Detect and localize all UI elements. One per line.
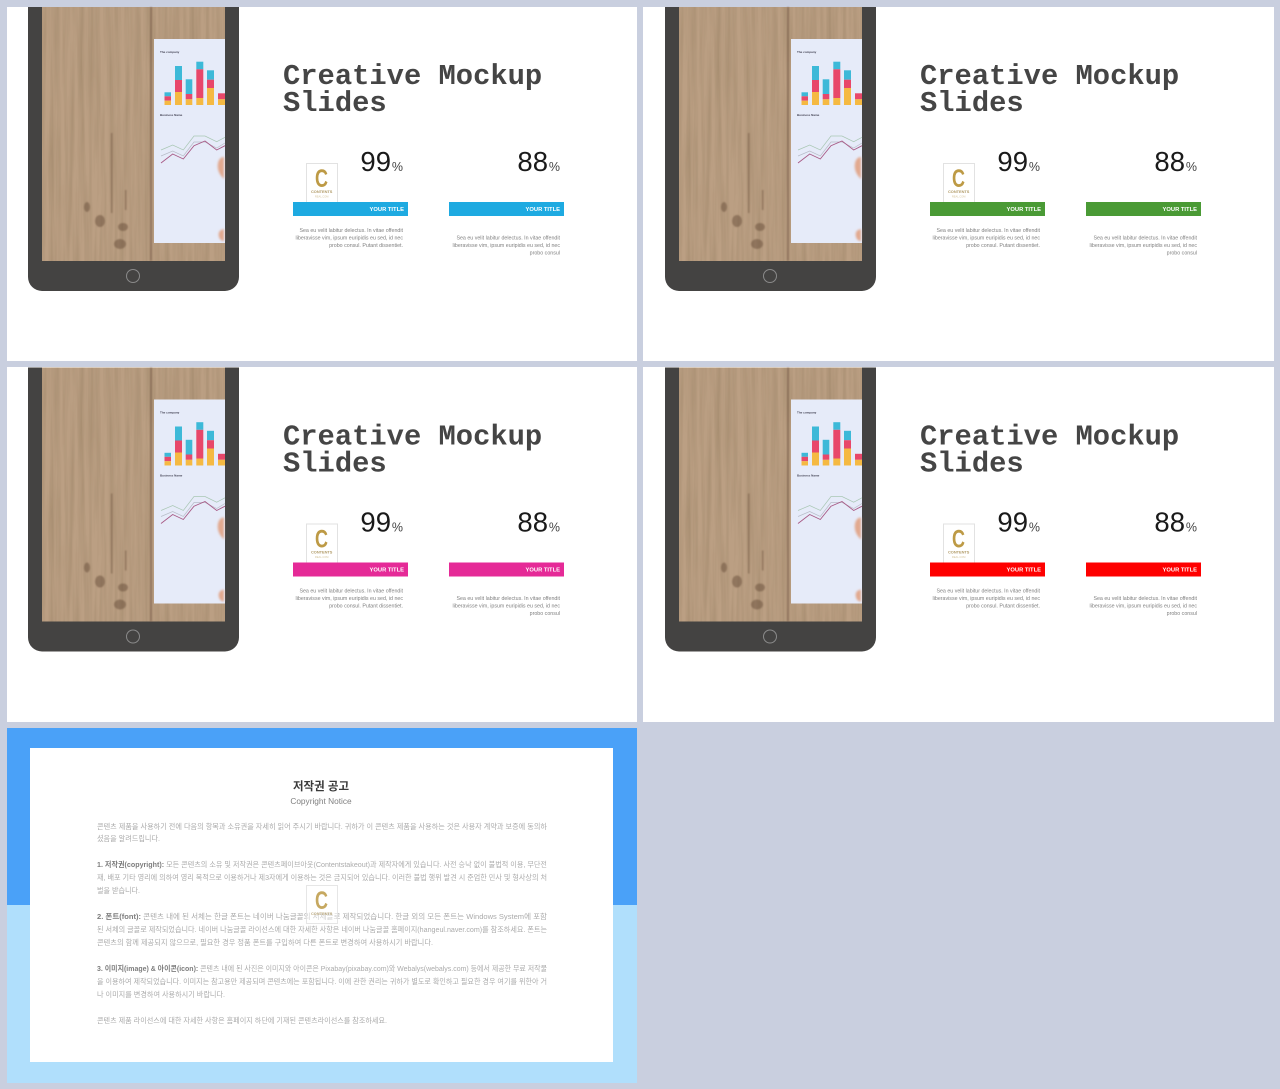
text right: Sea eu velit labitur delectus. In vitae offendit bbox=[1093, 596, 1198, 602]
section 3: image and icon: 3. 이미지(image) & 아이콘(icon): 콘텐츠 내에 된 사진은 이미지와 아이콘은 Pixabay(pixabay.com)와 Webalys(webalys.com) 등에서 제공한 무료 저작물 bbox=[97, 963, 547, 973]
stat: 88%: 88 bbox=[517, 146, 548, 177]
text right: probo consul bbox=[1167, 250, 1197, 256]
stat: 99%: 99 bbox=[360, 506, 391, 538]
panel: slide 2 green bbox=[643, 7, 1274, 361]
stat: 88%: 88 bbox=[517, 506, 548, 538]
logo watermark: CONTENTS bbox=[311, 189, 333, 194]
logo watermark: C bbox=[315, 526, 328, 554]
icon: tablet mockup bbox=[28, 7, 239, 291]
logo watermark bbox=[306, 164, 338, 202]
panel: slide 4 red bbox=[643, 367, 1274, 722]
panel: slide 3 pink bbox=[7, 367, 637, 722]
icon: tablet mockup: The company bbox=[160, 410, 180, 414]
closing line: 콘텐츠 제품 라이선스에 대한 자세한 사항은 홈페이지 하단에 기재된 콘텐츠라이선스를 참조하세요. bbox=[97, 1015, 387, 1025]
logo watermark: CONTENTS bbox=[311, 550, 333, 554]
text left: liberavisse vim, ipsum euripidis eu sed, id nec bbox=[933, 596, 1040, 602]
logo watermark: REAL.COM bbox=[952, 555, 965, 559]
icon: tablet mockup: Business Name bbox=[797, 113, 820, 117]
icon: tablet mockup: Business Name bbox=[160, 474, 183, 478]
subheading: Copyright Notice bbox=[290, 796, 352, 806]
label bar left: YOUR TITLE bbox=[370, 568, 404, 574]
logo watermark: CONTENTS bbox=[948, 550, 970, 554]
text left: probo consul. Putant dissentiet. bbox=[966, 243, 1040, 249]
text left: Sea eu velit labitur delectus. In vitae offendit bbox=[936, 588, 1041, 594]
icon: tablet mockup: The company bbox=[160, 50, 180, 54]
intro text bbox=[97, 821, 547, 843]
section 2: font: 콘텐츠의 함께 제공되지 않으므로, 필요한 경우 정품 폰트를 구입하여 다른 폰트로 변경하여 사용하시기 바랍니다. bbox=[97, 937, 433, 947]
text right: probo consul bbox=[1167, 611, 1197, 617]
icon: tablet mockup bbox=[28, 368, 239, 652]
text left: liberavisse vim, ipsum euripidis eu sed, id nec bbox=[933, 236, 1040, 242]
label bar right bbox=[449, 562, 564, 576]
stat: 99%: 99 bbox=[360, 146, 391, 177]
section 1: copyright: 벌을 받습니다. bbox=[97, 885, 140, 895]
label bar right: YOUR TITLE bbox=[1163, 568, 1197, 574]
text left: probo consul. Putant dissentiet. bbox=[966, 604, 1040, 610]
label bar right: YOUR TITLE bbox=[526, 568, 560, 574]
stat: 88%: % bbox=[1186, 160, 1197, 174]
panel: slide 1 blue bbox=[7, 7, 637, 361]
label bar left: YOUR TITLE bbox=[370, 207, 404, 213]
stat: 99%: % bbox=[392, 160, 403, 174]
title: Slides bbox=[920, 87, 1024, 120]
logo watermark bbox=[306, 524, 338, 563]
text right: liberavisse vim, ipsum euripidis eu sed, id nec bbox=[453, 243, 560, 249]
logo watermark: C bbox=[315, 887, 328, 915]
title: Creative Mockup bbox=[283, 60, 542, 93]
text right: Sea eu velit labitur delectus. In vitae offendit bbox=[1093, 236, 1198, 242]
title: Creative Mockup bbox=[920, 60, 1179, 93]
label bar right: YOUR TITLE bbox=[1163, 207, 1197, 213]
section 2: font: 2. 폰트(font): 콘텐츠 내에 된 서체는 한글 폰트는 네이버 나눔글꼴의 서체들로 제작되었습니다. 한글 외의 모든 폰트는 Windows System에 포함 bbox=[97, 911, 547, 921]
label bar left bbox=[293, 202, 408, 216]
stat: 99%: % bbox=[1029, 520, 1040, 534]
text right: liberavisse vim, ipsum euripidis eu sed, id nec bbox=[1090, 604, 1197, 610]
stat: 88%: % bbox=[549, 520, 560, 534]
title: Slides bbox=[283, 448, 387, 480]
label bar left bbox=[930, 202, 1045, 216]
logo watermark: REAL.COM bbox=[952, 194, 965, 198]
logo watermark: CONTENTS bbox=[948, 189, 970, 194]
icon: tablet mockup: The company bbox=[797, 50, 817, 54]
text left: liberavisse vim, ipsum euripidis eu sed, id nec bbox=[296, 596, 403, 602]
heading: 저작권 공고 bbox=[293, 779, 349, 793]
title: Creative Mockup bbox=[283, 420, 542, 454]
section 3: image and icon: 나 이미지를 변경하여 사용하시기 바랍니다. bbox=[97, 989, 225, 999]
section 1: copyright: 재, 배포 기타 영리에 의하여 영리 목적으로 이용하거나 제3자에게 이용하는 것은 금지되어 있습니다. 이러한 불법 행위 발견 시 준엄한 민사 및 형사상의 처 bbox=[97, 872, 547, 882]
text right: liberavisse vim, ipsum euripidis eu sed, id nec bbox=[1090, 243, 1197, 249]
section 2: font: 된 서체의 글꼴로 제작되었습니다. 네이버 나눔글꼴 라이선스에 대한 자세한 사항은 네이버 나눔글꼴 홈페이지(hangeul.naver.com)를 참조하세요. 폰트는 bbox=[97, 924, 547, 934]
title: Slides bbox=[283, 87, 387, 120]
stat: 99%: % bbox=[1029, 160, 1040, 174]
title: Creative Mockup bbox=[920, 420, 1179, 454]
section 2: font bbox=[97, 911, 547, 947]
section 3: image and icon bbox=[97, 963, 547, 999]
icon: tablet mockup: Business Name bbox=[160, 113, 183, 117]
label bar left: YOUR TITLE bbox=[1007, 207, 1041, 213]
text left: Sea eu velit labitur delectus. In vitae offendit bbox=[299, 588, 404, 594]
logo watermark bbox=[944, 524, 974, 563]
text right: probo consul bbox=[530, 250, 560, 256]
logo watermark bbox=[306, 886, 338, 924]
text left: probo consul. Putant dissentiet. bbox=[329, 243, 403, 249]
icon: tablet mockup bbox=[665, 7, 876, 291]
logo watermark: REAL.COM bbox=[315, 555, 328, 559]
label bar right bbox=[449, 202, 564, 216]
text right: liberavisse vim, ipsum euripidis eu sed, id nec bbox=[453, 604, 560, 610]
stat: 88%: % bbox=[1186, 520, 1197, 534]
section 1: copyright bbox=[97, 859, 547, 895]
text left: probo consul. Putant dissentiet. bbox=[329, 604, 403, 610]
logo watermark: C bbox=[952, 526, 965, 554]
text left: Sea eu velit labitur delectus. In vitae offendit bbox=[936, 228, 1041, 234]
label bar right bbox=[1086, 202, 1201, 216]
logo watermark: C bbox=[952, 165, 965, 193]
text left: Sea eu velit labitur delectus. In vitae offendit bbox=[299, 228, 404, 234]
stat: 88%: 88 bbox=[1154, 506, 1185, 538]
label bar right bbox=[1086, 562, 1201, 576]
logo watermark: CONTENTS bbox=[311, 911, 333, 916]
title: Slides bbox=[920, 448, 1024, 480]
icon: tablet mockup: The company bbox=[797, 410, 817, 414]
stat: 99%: 99 bbox=[997, 146, 1028, 177]
text right: Sea eu velit labitur delectus. In vitae offendit bbox=[456, 236, 561, 242]
intro text: 셨음을 알려드립니다. bbox=[97, 833, 160, 843]
intro text: 콘텐츠 제품을 사용하기 전에 다음의 항목과 소유권을 자세히 읽어 주시기 바랍니다. 귀하가 이 콘텐츠 제품을 사용하는 것은 사용자 계약과 보증에 동의하 bbox=[97, 821, 547, 831]
stat: 99%: % bbox=[392, 520, 403, 534]
stat: 88%: 88 bbox=[1154, 146, 1185, 177]
text right: Sea eu velit labitur delectus. In vitae offendit bbox=[456, 596, 561, 602]
white notice card bbox=[30, 748, 613, 1062]
label bar left: YOUR TITLE bbox=[1007, 568, 1041, 574]
label bar left bbox=[293, 562, 408, 576]
label bar left bbox=[930, 562, 1045, 576]
text left: liberavisse vim, ipsum euripidis eu sed, id nec bbox=[296, 236, 403, 242]
logo watermark: REAL.COM bbox=[315, 194, 328, 198]
text right: probo consul bbox=[530, 611, 560, 617]
icon: tablet mockup bbox=[665, 368, 876, 652]
panel: copyright notice slide bbox=[7, 728, 637, 1083]
logo watermark bbox=[944, 164, 974, 202]
logo watermark: C bbox=[315, 165, 328, 193]
section 1: copyright: 1. 저작권(copyright): 모든 콘텐츠의 소유 및 저작권은 콘텐츠페이브아웃(Contentstakeout)과 제작자에게 있습니다. 사전 승낙 없이 불법적 이용, 무단전 bbox=[97, 859, 547, 869]
stat: 88%: % bbox=[549, 160, 560, 174]
stat: 99%: 99 bbox=[997, 506, 1028, 538]
section 3: image and icon: 을 이용하여 제작되었습니다. 이미지는 참고용만 제공되며 콘텐츠에는 포함됩니다. 이에 관한 권리는 귀하가 별도로 확인하고 필요한 경우 여기를 위한아 거 bbox=[97, 976, 547, 986]
label bar right: YOUR TITLE bbox=[526, 207, 560, 213]
icon: tablet mockup: Business Name bbox=[797, 474, 820, 478]
